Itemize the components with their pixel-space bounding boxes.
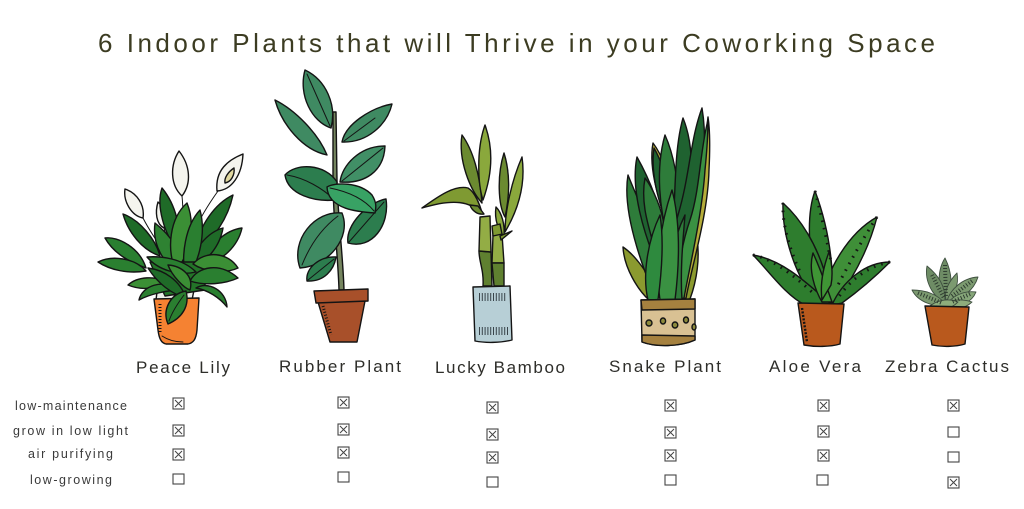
label: air purifying: air purifying [28, 447, 113, 461]
aloe pot [798, 303, 844, 346]
aloe leaves [753, 191, 890, 305]
name: aloe vera: Aloe Vera [769, 357, 862, 376]
checkboxes: peace lily [173, 398, 184, 484]
name: lucky bamboo: Lucky Bamboo [435, 358, 565, 377]
checkboxes: aloe vera [817, 400, 829, 485]
checkboxes: zebra cactus [948, 400, 959, 488]
bamboo pot [473, 286, 512, 342]
peace lily leaves [98, 188, 242, 324]
row labels [13, 399, 129, 487]
plant: aloe vera [753, 191, 890, 346]
label: grow in low light: grow in low light [13, 424, 129, 438]
name: rubber plant: Rubber Plant [279, 357, 401, 376]
peace lily flowers [125, 151, 243, 262]
plant: lucky bamboo [422, 125, 523, 342]
plant: zebra cactus [912, 258, 978, 346]
checkboxes: snake plant [665, 400, 676, 485]
name: zebra cactus: Zebra Cactus [885, 357, 1009, 376]
bamboo leaves [422, 125, 523, 240]
bamboo stalks [479, 216, 504, 286]
checkbox grid [173, 397, 959, 488]
title: 6 Indoor Plants that will Thrive in your Coworking Space [98, 28, 935, 58]
plant: snake plant [623, 108, 710, 346]
peace lily white stems [156, 280, 196, 300]
zebra cactus leaves [912, 258, 978, 310]
plant: rubber plant [275, 70, 392, 342]
snake plant leaves [623, 108, 710, 300]
name: snake plant: Snake Plant [609, 357, 721, 376]
label: low-maintenance: low-maintenance [15, 399, 127, 413]
snake plant pot [641, 299, 696, 346]
rubber plant stem [333, 112, 344, 290]
checkboxes: lucky bamboo [487, 402, 498, 487]
name: peace lily: Peace Lily [136, 358, 230, 377]
plant: peace lily [98, 151, 243, 344]
rubber plant pot [314, 289, 368, 342]
plant names [136, 357, 1009, 377]
peace lily pot [154, 298, 199, 344]
checkboxes: rubber plant [338, 397, 349, 482]
label: low-growing: low-growing [30, 473, 112, 487]
zebra cactus pot [925, 306, 969, 346]
rubber plant leaves [275, 70, 392, 281]
